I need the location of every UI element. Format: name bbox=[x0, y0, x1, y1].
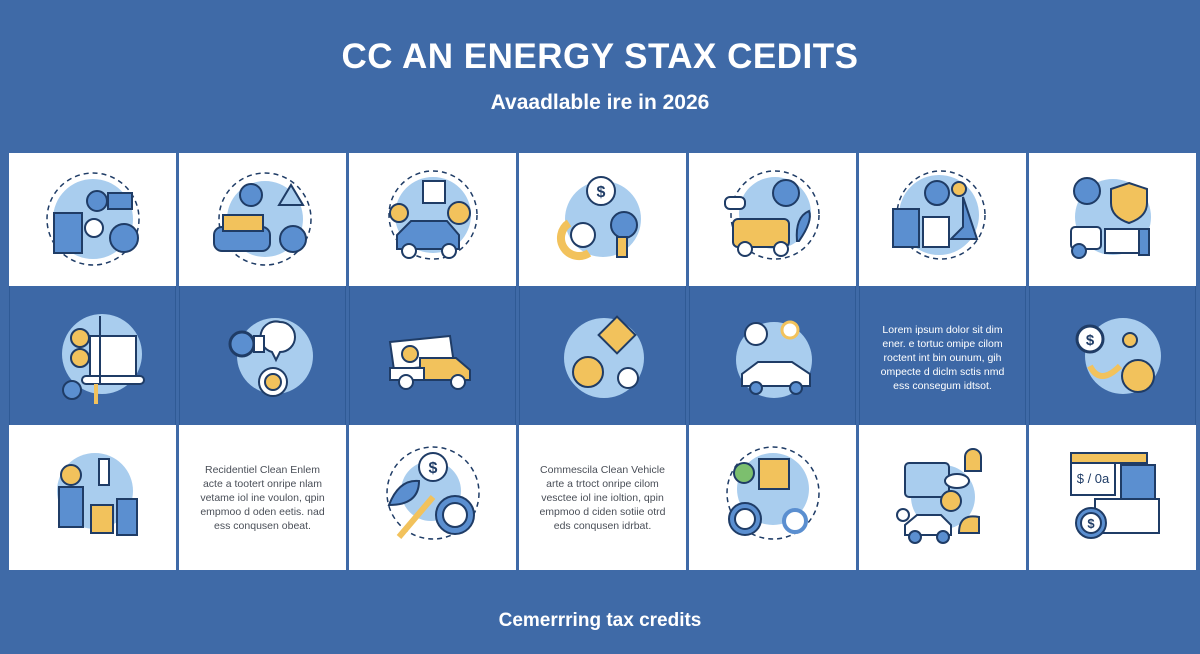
cell r3c2 text block bbox=[179, 425, 346, 570]
cell r3c4 text block: Commescila Clean Vehicle bbox=[540, 464, 665, 476]
cell r3c7 icon bbox=[1029, 425, 1196, 570]
cell r1c5 icon bbox=[689, 153, 856, 286]
cell r3c7 icon: $ bbox=[1087, 516, 1095, 531]
cell r3c2 text block: ess conqusen obeat. bbox=[214, 520, 311, 532]
cell r2c6 text block: ener. e tortuc omipe cilom bbox=[882, 338, 1003, 350]
cell r3c2 text block: Recidentiel Clean Enlem bbox=[205, 464, 320, 476]
cell r3c3 icon bbox=[349, 425, 516, 570]
cell r3c4 text block: eds conqusen idrbat. bbox=[554, 520, 651, 532]
cell r2c1 icon bbox=[9, 286, 176, 425]
cell r2c4 icon bbox=[519, 286, 686, 425]
cell r1c1 icon bbox=[9, 153, 176, 286]
cell r3c1 icon bbox=[9, 425, 176, 570]
cell r1c3 icon bbox=[349, 153, 516, 286]
cell r2c7 icon bbox=[1029, 286, 1196, 425]
cell r2c6 text block bbox=[859, 286, 1026, 425]
title: CC AN ENERGY STAX CEDITS bbox=[342, 37, 858, 76]
cell r1c7 icon bbox=[1029, 153, 1196, 286]
subtitle: Avaadlable ire in 2026 bbox=[491, 91, 709, 114]
cell r3c5 icon bbox=[689, 425, 856, 570]
cell r3c2 text block: empmoo d oden eetis. nad bbox=[200, 506, 325, 518]
footer caption: Cemerrring tax credits bbox=[499, 610, 701, 631]
cell r1c6 icon bbox=[859, 153, 1026, 286]
cell r3c4 text block bbox=[519, 425, 686, 570]
cell r3c2 text block: acte a tootert onripe nlam bbox=[203, 478, 322, 490]
cell r3c3 icon: $ bbox=[429, 460, 438, 477]
cell r3c6 icon bbox=[859, 425, 1026, 570]
cell r3c4 text block: arte a trtoct onripe cilom bbox=[546, 478, 659, 490]
cell r2c3 icon bbox=[349, 286, 516, 425]
cell r1c4 icon bbox=[519, 153, 686, 286]
cell r2c6 text block: ess consegum idtsot. bbox=[893, 380, 992, 392]
cell r1c4 icon: $ bbox=[597, 184, 606, 201]
cell r2c6 text block: Lorem ipsum dolor sit dim bbox=[882, 324, 1003, 336]
cell r2c6 text block: ompecte d diclm sctis nmd bbox=[881, 366, 1004, 378]
cell r1c2 icon bbox=[179, 153, 346, 286]
cell r3c7 icon: $ / 0a bbox=[1077, 471, 1110, 486]
cell r3c4 text block: empmoo d ciden sotiie otrd bbox=[539, 506, 666, 518]
cell r2c7 icon: $ bbox=[1086, 332, 1095, 349]
cell r2c6 text block: roctent int bin ounum, gih bbox=[884, 352, 1001, 364]
cell r3c2 text block: vetame iol ine voulon, qpin bbox=[200, 492, 325, 504]
cell r2c2 icon bbox=[179, 286, 346, 425]
cell r2c5 icon bbox=[689, 286, 856, 425]
cell r3c4 text block: vesctee iol ine ioltion, qpin bbox=[541, 492, 664, 504]
